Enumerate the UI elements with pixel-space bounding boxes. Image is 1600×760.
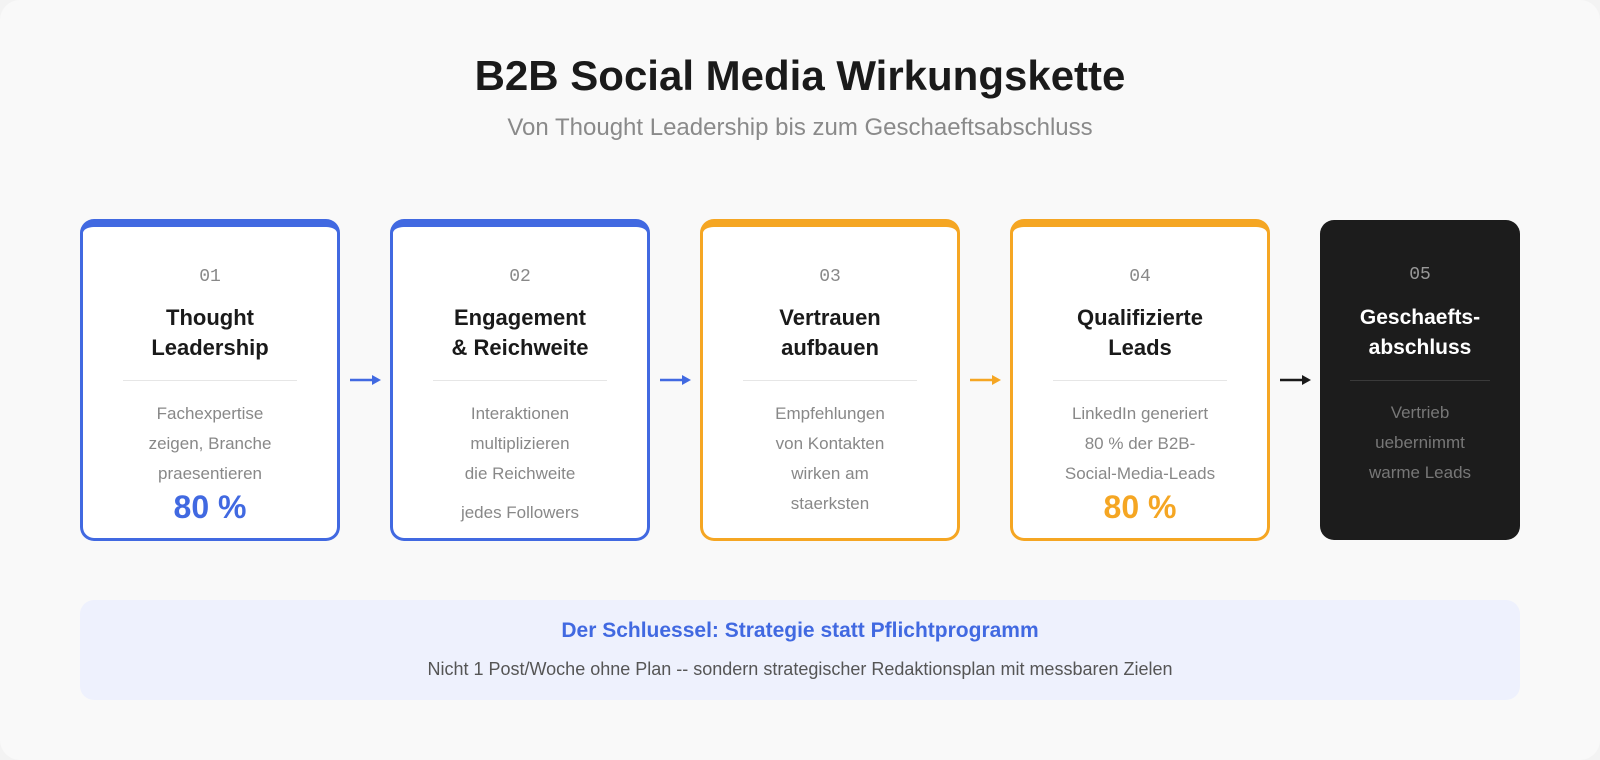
arrow 4 <box>1280 375 1311 385</box>
step 5 heading <box>1360 306 1480 359</box>
step 2 heading: Engagement <box>454 305 586 330</box>
step 2 text: die Reichweite <box>465 464 575 483</box>
step 5 text <box>1369 403 1471 482</box>
step 1 text: Fachexpertise <box>157 404 263 423</box>
step 4 text: 80 % der B2B- <box>1085 434 1195 453</box>
step 3 text: Empfehlungen <box>775 404 885 423</box>
subtitle: Von Thought Leadership bis zum Geschaeftsabschluss <box>507 114 1093 141</box>
step 4 heading: Leads <box>1108 335 1172 360</box>
step 4 text: LinkedIn generiert <box>1072 404 1208 423</box>
step 5 heading: Geschaefts- <box>1360 306 1480 329</box>
step 1 stat: 80 % <box>174 489 246 525</box>
panel: step 3 <box>700 219 960 541</box>
step 1 heading: Thought <box>166 305 254 330</box>
step 3 text: von Kontakten <box>776 434 884 453</box>
step 2 heading <box>452 305 588 360</box>
step 3 heading: aufbauen <box>781 335 879 360</box>
panel: step 2 <box>390 219 650 541</box>
arrow 3 <box>970 375 1001 385</box>
step 4 heading: Qualifizierte <box>1077 305 1203 330</box>
panel: step 4 <box>1010 219 1270 541</box>
arrow 2 <box>660 375 691 385</box>
step 1 heading <box>151 305 269 360</box>
arrow 1 <box>350 375 381 385</box>
step 3 text <box>775 404 885 513</box>
step 4 heading <box>1077 305 1203 360</box>
title: B2B Social Media Wirkungskette <box>475 52 1125 99</box>
step 1 text: praesentieren <box>158 464 262 483</box>
panel: step 5: 05 <box>1409 265 1431 285</box>
step 1 text: zeigen, Branche <box>149 434 271 453</box>
step 2 text: Interaktionen <box>471 404 569 423</box>
step 1 text <box>149 404 271 483</box>
step 4 text <box>1065 404 1215 483</box>
step 3 heading <box>779 305 881 360</box>
step 5 text: Vertrieb <box>1391 403 1449 422</box>
step 5 heading: abschluss <box>1369 336 1471 359</box>
panel: step 1: 01 <box>199 267 221 287</box>
step 4 text: Social-Media-Leads <box>1065 464 1215 483</box>
panel: step 3: 03 <box>819 267 841 287</box>
step 2 heading: & Reichweite <box>452 335 588 360</box>
panel: step 2: 02 <box>509 267 531 287</box>
panel: step 5 <box>1320 220 1520 540</box>
step 3 heading: Vertrauen <box>779 305 881 330</box>
step 2 text: multiplizieren <box>470 434 570 453</box>
callout: key message <box>80 600 1520 700</box>
step 3 text: wirken am <box>791 464 869 483</box>
step 4 stat: 80 % <box>1104 489 1176 525</box>
step 3 text: staerksten <box>791 494 869 513</box>
callout text: Nicht 1 Post/Woche ohne Plan -- sondern strategischer Redaktionsplan mit messbaren Zielen <box>427 659 1173 679</box>
panel: step 4: 04 <box>1129 267 1151 287</box>
callout heading: Der Schluessel: Strategie statt Pflichtprogramm <box>561 619 1039 642</box>
step 2 text: jedes Followers <box>461 503 579 522</box>
panel: step 1 <box>80 219 340 541</box>
step 5 text: uebernimmt <box>1375 433 1465 452</box>
step 2 text <box>460 404 579 522</box>
step 1 heading: Leadership <box>151 335 269 360</box>
step 5 text: warme Leads <box>1369 463 1471 482</box>
